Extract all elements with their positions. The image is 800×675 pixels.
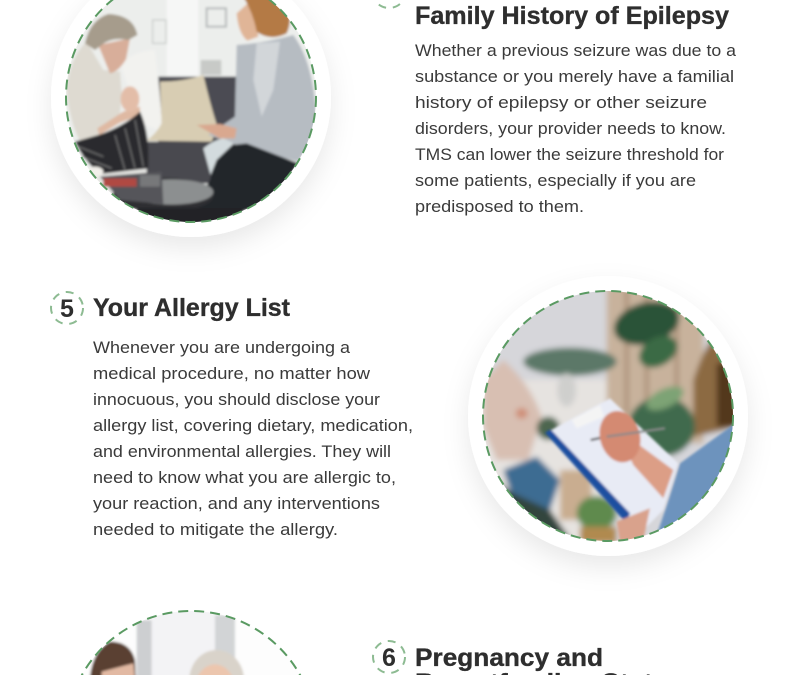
heading: Your Allergy List: Your Allergy List <box>93 294 291 322</box>
text block: epilepsy paragraph: Whether a previous seizure was due to a <box>415 42 737 60</box>
text block: epilepsy paragraph: predisposed to them. <box>415 198 584 216</box>
text block: epilepsy paragraph <box>415 42 737 216</box>
text block: allergy paragraph: medical procedure, no matter how <box>93 365 370 383</box>
text block: allergy paragraph: allergy list, covering dietary, medication, <box>93 417 413 435</box>
heading: Pregnancy and Breastfeeding Status <box>415 644 684 675</box>
panel: photo circle of clipboard note taking <box>468 276 748 556</box>
badge: step 5 <box>51 292 83 324</box>
panel: photo circle of two women in counselling <box>40 0 340 250</box>
photo: patient and provider on sofa <box>66 0 316 222</box>
heading: Pregnancy and Breastfeeding Status: Pregnancy and <box>415 644 603 672</box>
text block: allergy paragraph: innocuous, you should disclose your <box>93 391 381 409</box>
panel: photo circle of couple <box>80 610 302 675</box>
text block: epilepsy paragraph: substance or you merely have a familial <box>415 68 734 86</box>
text block: allergy paragraph: needed to mitigate the allergy. <box>93 521 338 539</box>
text block: epilepsy paragraph: disorders, your provider needs to know. <box>415 120 726 138</box>
text block: epilepsy paragraph: TMS can lower the seizure threshold for <box>415 146 725 164</box>
text block: allergy paragraph: need to know what you are allergic to, <box>93 469 396 487</box>
photo: man and woman by a window <box>88 611 245 675</box>
text block: allergy paragraph: and environmental allergies. They will <box>93 443 391 461</box>
text block: allergy paragraph: Whenever you are undergoing a <box>93 339 351 357</box>
text block: allergy paragraph: your reaction, and any interventions <box>93 495 380 513</box>
text block: epilepsy paragraph: some patients, especially if you are <box>415 172 696 190</box>
photo: hand writing on clipboard <box>483 291 733 541</box>
heading: Family History of Epilepsy: Family History of Epilepsy <box>415 2 729 30</box>
text block: allergy paragraph <box>93 339 413 539</box>
badge: step 5: 5 <box>60 295 74 323</box>
badge: step 6 <box>373 641 405 673</box>
badge: step 4 number ring <box>372 0 406 8</box>
badge: step 6: 6 <box>382 644 396 672</box>
text block: epilepsy paragraph: history of epilepsy or other seizure <box>415 94 707 112</box>
